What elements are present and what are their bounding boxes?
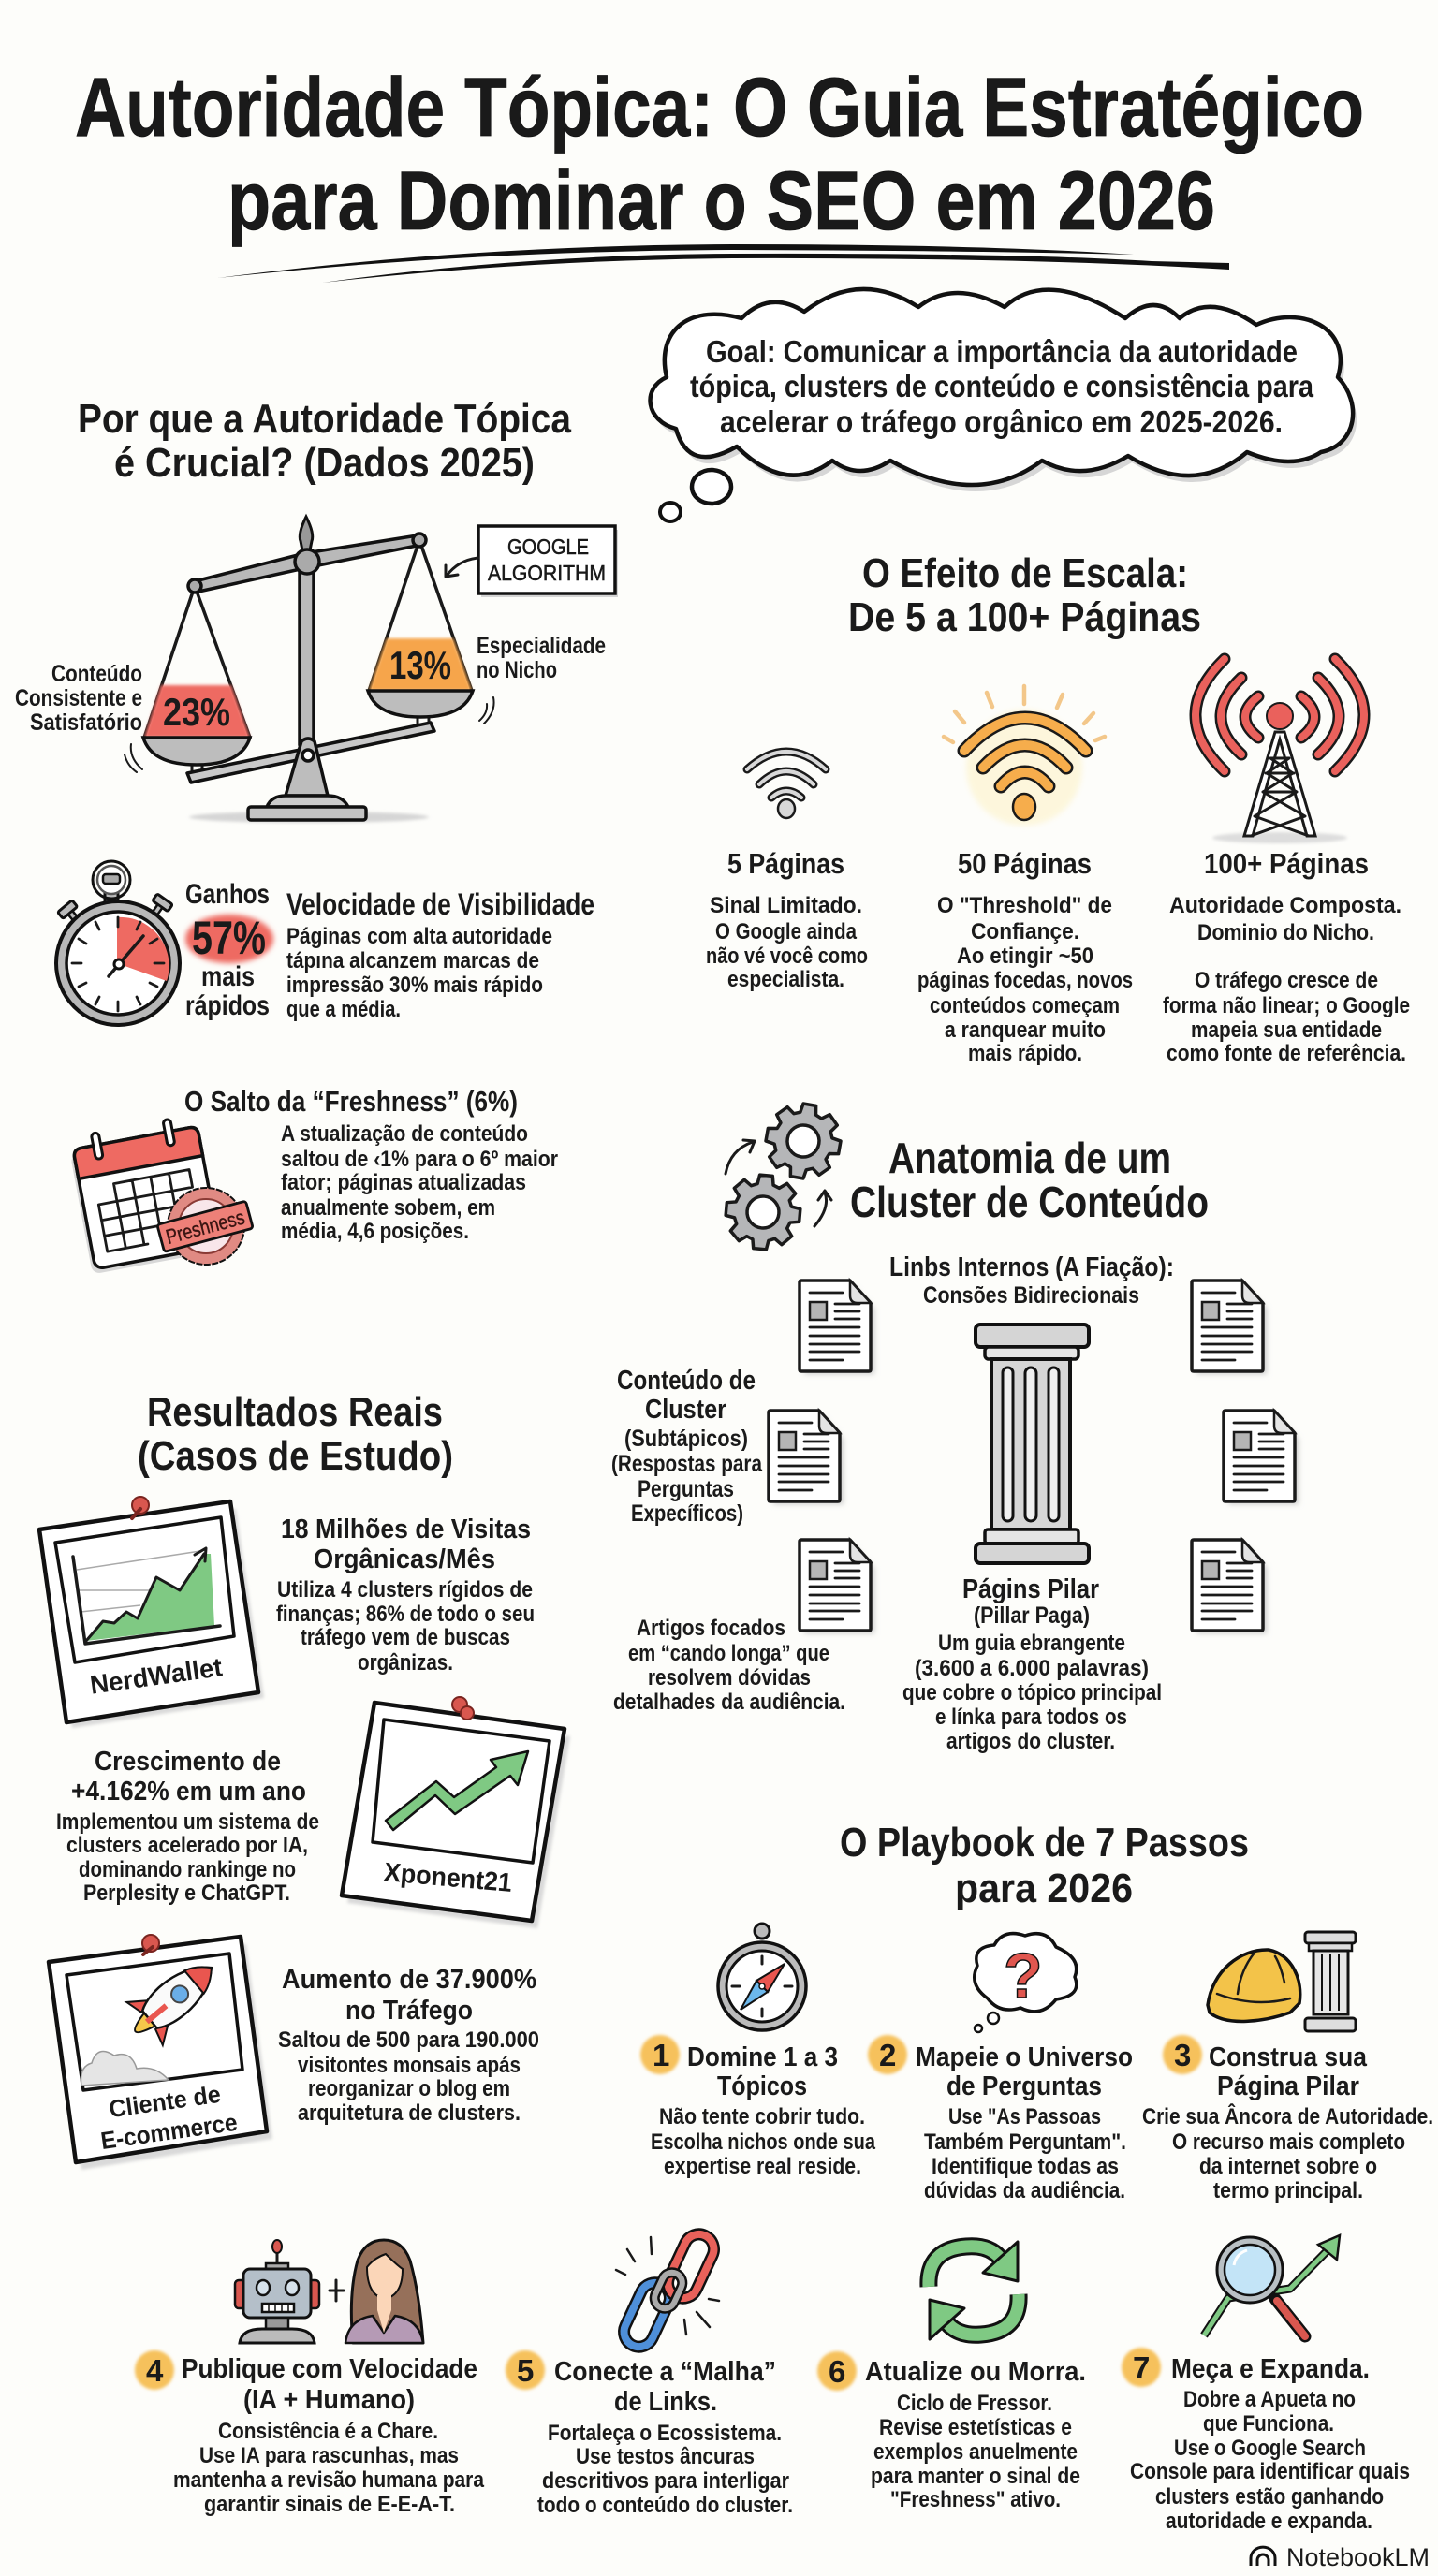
column: 50 pages: O "Threshold" de <box>937 893 1112 918</box>
text: e-commerce result <box>278 1965 539 2126</box>
step 3 <box>1142 1932 1433 2203</box>
text: focused articles <box>613 1616 845 1715</box>
step 7 <box>1122 2235 1410 2534</box>
column: 100+ pages: 100+ Páginas <box>1204 847 1369 880</box>
stat: 57% faster: mais <box>201 961 255 992</box>
label: google algorithm: GOOGLE <box>507 534 589 559</box>
column: 50 pages <box>917 847 1133 1066</box>
heading: why: Por que a Autoridade Tópica <box>78 396 571 442</box>
step 5: de Links. <box>614 2387 717 2417</box>
icon: refresh arrows <box>929 2242 1019 2339</box>
column: 100+ pages: mapeia sua entidade <box>1191 1017 1382 1043</box>
text: e-commerce result: Saltou de 500 para 190.000 <box>278 2027 539 2053</box>
text: visibility speed: que a média. <box>286 997 401 1022</box>
text: visibility speed <box>286 887 594 1022</box>
text: NerdWallet result: finanças; 86% de todo o seu <box>276 1602 535 1627</box>
icon: gears <box>723 1098 846 1252</box>
icon: balance scale <box>125 517 494 823</box>
text: pillar page <box>902 1574 1162 1754</box>
card: Xponent21: Xponent21 <box>383 1857 513 1897</box>
text: freshness jump: O Salto da “Freshness” (6%) <box>184 1085 518 1118</box>
stat: 57% faster: 57% <box>192 912 266 964</box>
column: 100+ pages <box>1163 847 1410 1066</box>
card: e-commerce client: Cliente de <box>107 2080 223 2123</box>
step 6: Atualize ou Morra. <box>865 2357 1086 2387</box>
label: niche expertise: Especialidade <box>477 633 606 659</box>
step 1: Escolha nichos onde sua <box>651 2130 876 2155</box>
icon: medium wifi <box>944 686 1105 826</box>
card: NerdWallet: NerdWallet <box>88 1652 224 1700</box>
heading: why: é Crucial? (Dados 2025) <box>114 440 535 486</box>
text: Xponent21 result <box>56 1747 319 1906</box>
text: visibility speed: tápına alcanzem marcas de <box>286 948 539 973</box>
column: 50 pages: páginas focedas, novos <box>917 968 1133 993</box>
callout: goal thought bubble <box>651 289 1357 521</box>
text: pillar page: Um guia ebrangente <box>938 1631 1125 1656</box>
heading: why <box>78 396 571 486</box>
text: Xponent21 result: Implementou um sistema de <box>56 1809 319 1835</box>
title: para Dominar o SEO em 2026 <box>227 154 1215 247</box>
step 5: todo o conteúdo do cluster. <box>537 2493 793 2518</box>
step 1 <box>640 1924 876 2179</box>
icons: cluster documents <box>769 1281 1299 1633</box>
label: niche expertise: no Nicho <box>477 657 557 683</box>
text: Xponent21 result: Perplesity e ChatGPT. <box>83 1881 290 1906</box>
label: cluster content: Perguntas <box>638 1476 734 1502</box>
step 7: clusters estão ganhando <box>1155 2484 1384 2510</box>
text: Xponent21 result: Crescimento de <box>95 1747 281 1777</box>
text: pillar page: artigos do cluster. <box>946 1729 1115 1754</box>
label: cluster content: (Subtápicos) <box>624 1426 748 1452</box>
column: 50 pages: a ranquear muito <box>945 1017 1106 1043</box>
step 3: O recurso mais completo <box>1172 2130 1405 2155</box>
text: e-commerce result: reorganizar o blog em <box>308 2076 510 2101</box>
column: 5 pages <box>706 847 868 992</box>
label: cluster content: Conteúdo de <box>617 1366 756 1396</box>
column: 50 pages: mais rápido. <box>968 1041 1082 1066</box>
icon: helmet and pillar <box>1208 1932 1356 2031</box>
step 7: autoridade e expanda. <box>1166 2509 1372 2534</box>
column: 50 pages: Confiançe. <box>971 919 1079 944</box>
icon: question cloud: ? <box>1004 1940 1043 2012</box>
label: cluster content: Cluster <box>645 1395 726 1425</box>
text: Xponent21 result: +4.162% em um ano <box>71 1777 306 1807</box>
icon: magnifier and growth <box>1204 2235 1340 2336</box>
label: internal links: Linbs Internos (A Fiação): <box>889 1252 1174 1282</box>
callout: goal thought bubble: acelerar o tráfego orgânico em 2025-2026. <box>720 404 1283 439</box>
column: 50 pages: 50 Páginas <box>958 847 1092 880</box>
step 3: Página Pilar <box>1217 2071 1359 2101</box>
icon: weak wifi <box>747 752 826 818</box>
step 2: Mapeie o Universo <box>916 2042 1133 2072</box>
heading: playbook: O Playbook de 7 Passos <box>840 1820 1249 1866</box>
step 6: Ciclo de Fressor. <box>897 2391 1052 2416</box>
step 5: 5 <box>517 2353 534 2388</box>
step 5 <box>506 2230 793 2518</box>
step 1: Tópicos <box>717 2071 807 2101</box>
text: freshness jump: fator; páginas atualizadas <box>281 1170 526 1195</box>
step 5: descritivos para interligar <box>542 2468 789 2494</box>
panel: scale effect <box>706 550 1410 1066</box>
label: internal links <box>889 1252 1174 1309</box>
step 4: Consistência é a Chare. <box>218 2419 438 2444</box>
text: NerdWallet result: orgânizas. <box>358 1650 453 1676</box>
step 4: Use IA para rascunhas, mas <box>199 2443 459 2468</box>
heading: cluster anatomy: Cluster de Conteúdo <box>850 1178 1209 1226</box>
label: google algorithm: ALGORITHM <box>488 561 606 585</box>
step 7: Meça e Expanda. <box>1171 2354 1370 2384</box>
panel: cluster anatomy <box>611 1098 1299 1754</box>
icon: pillar <box>976 1325 1089 1563</box>
label: google algorithm <box>446 526 618 597</box>
text: focused articles: resolvem dóvidas <box>648 1665 811 1690</box>
card: e-commerce client: E-commerce <box>99 2108 239 2155</box>
step 4: 4 <box>146 2353 164 2388</box>
text: Xponent21 result: clusters acelerado por IA, <box>66 1833 308 1858</box>
step 4: mantenha a revisão humana para <box>173 2467 485 2493</box>
text: focused articles: em “cando longa” que <box>628 1641 829 1666</box>
step 2: 2 <box>879 2038 896 2072</box>
text: e-commerce result: visitontes monsais apás <box>298 2053 521 2078</box>
step 2: Identifique todas as <box>932 2154 1119 2179</box>
text: NerdWallet result: Utiliza 4 clusters rígidos de <box>277 1577 533 1603</box>
step 4: garantir sinais de E-E-A-T. <box>204 2492 455 2517</box>
column: 5 pages: não vé você como <box>706 944 868 969</box>
heading: playbook <box>840 1820 1249 1911</box>
panel: case studies <box>39 1389 570 2170</box>
stat: 57% faster: rápidos <box>185 990 270 1021</box>
step 6: exemplos anuelmente <box>873 2439 1078 2465</box>
heading: scale effect: O Efeito de Escala: <box>862 550 1188 596</box>
icon: chain link <box>616 2230 719 2351</box>
column: 100+ pages: Dominio do Nicho. <box>1197 920 1374 945</box>
text: e-commerce result: Aumento de 37.900% <box>282 1965 536 1995</box>
heading: cluster anatomy: Anatomia de um <box>888 1134 1171 1182</box>
step 5: Fortaleça o Ecossistema. <box>548 2421 782 2446</box>
step 2: de Perguntas <box>946 2071 1102 2101</box>
label: consistent content <box>15 661 142 736</box>
text: pillar page: Págins Pilar <box>962 1574 1099 1604</box>
label: consistent content: Consistente e <box>15 685 142 711</box>
step 2: Use "As Passoas <box>948 2104 1101 2130</box>
icon: balance scale: 13% <box>389 643 451 687</box>
text: e-commerce result: no Tráfego <box>345 1996 473 2026</box>
callout: goal thought bubble: Goal: Comunicar a importância da autoridade <box>706 334 1298 369</box>
step 3: Construa sua <box>1209 2042 1368 2072</box>
heading: real results: (Casos de Estudo) <box>138 1433 453 1479</box>
text: e-commerce result: arquitetura de clusters. <box>298 2100 521 2126</box>
step 3: da internet sobre o <box>1199 2154 1377 2179</box>
label: cluster content: Expecíficos) <box>631 1500 743 1527</box>
card: Xponent21 <box>342 1697 570 1928</box>
text: freshness jump: A stualização de conteúdo <box>281 1121 528 1147</box>
step 6 <box>817 2242 1086 2512</box>
text: focused articles: detalhades da audiência. <box>613 1690 845 1715</box>
text: visibility speed: impressão 30% mais rápido <box>286 973 543 998</box>
heading: cluster anatomy <box>850 1134 1209 1226</box>
heading: real results: Resultados Reais <box>147 1389 443 1435</box>
step 4: Publique com Velocidade <box>182 2354 477 2384</box>
text: freshness jump: anualmente sobem, em <box>281 1195 495 1221</box>
icon: calendar with freshness stamp: Preshness <box>163 1206 247 1249</box>
step 7: Dobre a Apueta no <box>1183 2387 1356 2412</box>
heading: real results <box>138 1389 453 1479</box>
icon: compass <box>718 1924 806 2030</box>
label: consistent content: Satisfatório <box>30 710 142 736</box>
label: cluster content: (Respostas para <box>611 1451 763 1477</box>
card: NerdWallet <box>39 1497 264 1728</box>
heading: scale effect <box>848 550 1201 640</box>
panel: why topical authority <box>15 396 618 1274</box>
column: 100+ pages: Autoridade Composta. <box>1169 893 1401 918</box>
text: pillar page: (3.600 a 6.000 palavras) <box>915 1656 1149 1681</box>
text: freshness jump: média, 4,6 posições. <box>281 1219 469 1244</box>
step 7: que Funciona. <box>1203 2411 1334 2437</box>
text: pillar page: que cobre o tópico principal <box>902 1680 1162 1705</box>
label: consistent content: Conteúdo <box>51 661 142 687</box>
column: 5 pages: 5 Páginas <box>727 847 844 880</box>
text: NerdWallet result <box>276 1515 535 1676</box>
panel: 7-step playbook <box>135 1820 1433 2534</box>
callout: goal thought bubble: tópica, clusters de conteúdo e consistência para <box>690 369 1314 403</box>
column: 50 pages: conteúdos começam <box>930 993 1120 1018</box>
icon: balance scale: 23% <box>163 690 230 734</box>
column: 50 pages: Ao etingir ~50 <box>957 944 1093 969</box>
text: visibility speed: Páginas com alta autoridade <box>286 924 552 949</box>
text: freshness jump <box>184 1085 558 1244</box>
step 1: Não tente cobrir tudo. <box>659 2104 865 2130</box>
step 5: Conecte a “Malha” <box>554 2357 776 2387</box>
label: cluster content <box>611 1366 763 1527</box>
step 7: Use o Google Search <box>1174 2436 1366 2461</box>
step 1: expertise real reside. <box>664 2154 861 2179</box>
logo: NotebookLM: NotebookLM <box>1286 2543 1430 2571</box>
step 6: 6 <box>829 2354 845 2389</box>
step 3: 3 <box>1174 2038 1191 2072</box>
text: freshness jump: saltou de ‹1% para o 6º maior <box>281 1147 558 1172</box>
stat: 57% faster <box>185 879 273 1021</box>
step 1: Domine 1 a 3 <box>687 2042 838 2072</box>
step 6: "Freshness" ativo. <box>890 2487 1061 2512</box>
title <box>75 60 1364 283</box>
text: Xponent21 result: dominando rankinge no <box>79 1857 296 1882</box>
icon: stopwatch <box>56 861 180 1025</box>
icon: signal tower <box>1196 659 1364 843</box>
step 6: Revise estetísticas e <box>879 2415 1072 2440</box>
step 5: Use testos âncuras <box>576 2444 755 2469</box>
text: pillar page: (Pillar Paga) <box>974 1603 1090 1629</box>
icon: calendar with freshness stamp <box>67 1114 253 1274</box>
step 4: (IA + Humano) <box>243 2385 415 2415</box>
text: NerdWallet result: tráfego vem de buscas <box>301 1625 510 1650</box>
icon: question cloud <box>975 1934 1077 2032</box>
card: e-commerce client <box>49 1935 272 2170</box>
step 4 <box>135 2240 485 2517</box>
label: niche expertise <box>477 633 606 683</box>
text: focused articles: Artigos focados <box>637 1616 785 1641</box>
label: internal links: Consões Bidirecionais <box>923 1282 1139 1309</box>
heading: playbook: para 2026 <box>955 1866 1133 1911</box>
column: 5 pages: O Google ainda <box>715 919 858 944</box>
icon: robot and person <box>235 2240 423 2343</box>
text: NerdWallet result: Orgânicas/Mês <box>314 1544 495 1574</box>
stat: 57% faster: Ganhos <box>185 879 270 910</box>
step 2 <box>868 1934 1133 2203</box>
text: visibility speed: Velocidade de Visibilidade <box>286 887 594 921</box>
text: pillar page: e línka para todos os <box>935 1705 1127 1730</box>
column: 5 pages: Sinal Limitado. <box>710 893 862 918</box>
text: NerdWallet result: 18 Milhões de Visitas <box>281 1515 531 1544</box>
step 2: dúvidas da audiência. <box>924 2178 1125 2203</box>
heading: scale effect: De 5 a 100+ Páginas <box>848 594 1201 640</box>
step 7: 7 <box>1133 2350 1150 2385</box>
step 2: Também Perguntam". <box>924 2130 1126 2155</box>
column: 5 pages: especialista. <box>727 967 844 992</box>
step 3: termo principal. <box>1213 2178 1363 2203</box>
step 1: 1 <box>653 2038 669 2072</box>
column: 100+ pages: como fonte de referência. <box>1167 1041 1406 1066</box>
step 6: para manter o sinal de <box>871 2464 1080 2489</box>
column: 100+ pages: O tráfego cresce de <box>1195 968 1378 993</box>
